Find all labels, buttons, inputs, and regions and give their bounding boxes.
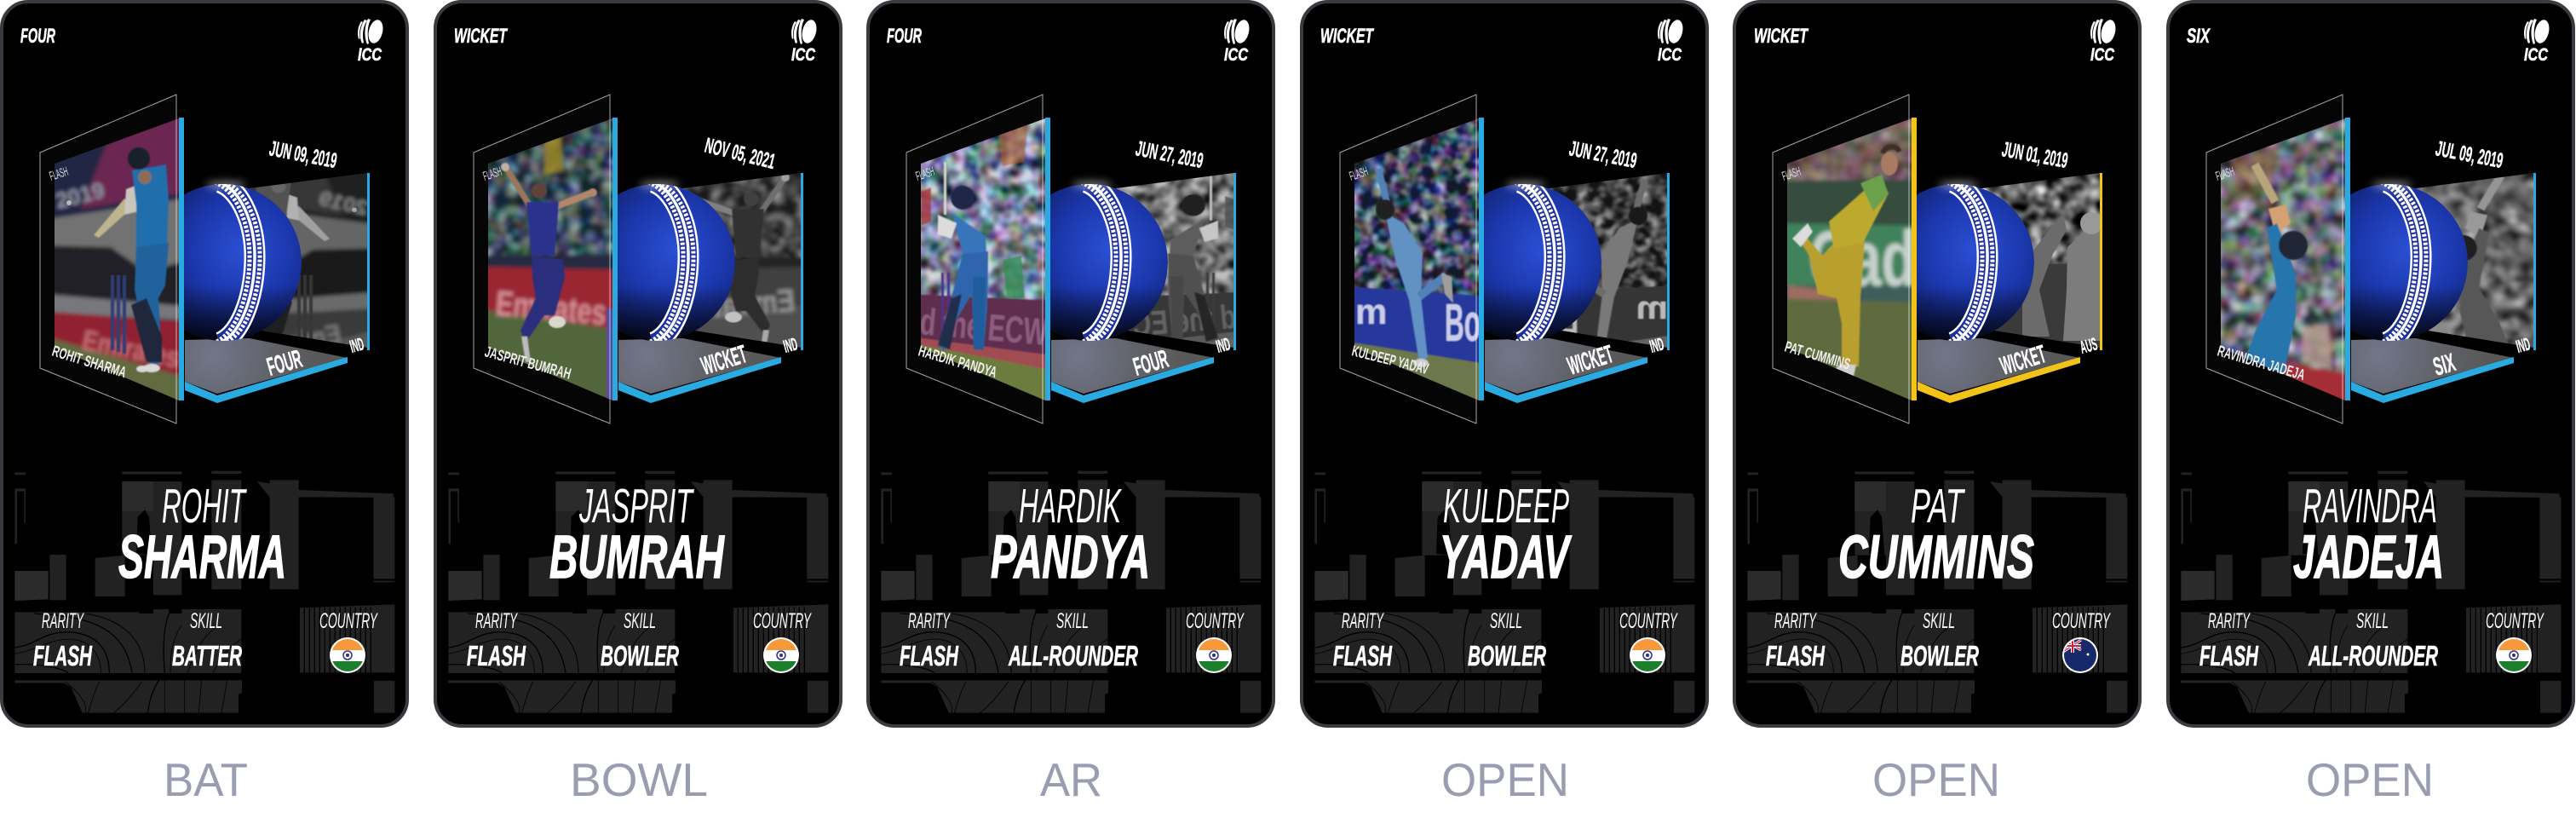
cricket ball	[145, 182, 302, 343]
floor event: SIX	[2430, 349, 2458, 382]
card frame	[2168, 2, 2573, 726]
skill label: SKILL	[1490, 609, 1522, 633]
floor	[1918, 338, 2080, 394]
team code: IND	[348, 334, 366, 357]
back edge bar	[801, 173, 803, 350]
event tag: FOUR	[887, 25, 922, 48]
floor	[185, 338, 348, 394]
icon: India flag	[1196, 637, 1232, 673]
role caption: OPEN	[1441, 753, 1569, 806]
back mirrored photo	[1115, 173, 1233, 348]
back edge bar	[1667, 173, 1670, 350]
background texture	[1747, 471, 2127, 713]
icon: ICC logo: ICC	[358, 45, 382, 65]
player on photo: ROHIT SHARMA	[50, 343, 129, 381]
icon: ICC logo	[791, 18, 819, 65]
icon: India flag	[330, 637, 365, 673]
floor edge	[1918, 357, 2080, 403]
skill value: ALL-ROUNDER	[2308, 640, 2438, 671]
date: JUN 01, 2019	[2000, 137, 2070, 173]
first name: PAT	[1911, 479, 1966, 533]
cricket ball	[2311, 182, 2468, 343]
rarity value: FLASH	[1333, 640, 1393, 671]
card 4: Kuldeep Yadav: WICKET	[1564, 340, 1617, 381]
team code: IND	[2514, 334, 2533, 357]
floor edge	[618, 357, 781, 403]
back edge bar	[367, 173, 370, 350]
front edge bar	[2345, 118, 2350, 400]
team code: IND	[1647, 334, 1666, 357]
background texture	[448, 471, 828, 713]
back mirrored photo	[249, 173, 367, 348]
card 4: Kuldeep Yadav	[1302, 2, 1707, 806]
rarity on photo: FLASH	[1780, 164, 1803, 184]
date: JUN 27, 2019	[1567, 136, 1639, 173]
rarity label: RARITY	[1774, 609, 1817, 633]
rarity label: RARITY	[1342, 609, 1384, 633]
skill value: ALL-ROUNDER	[1008, 640, 1138, 671]
country label: COUNTRY	[1186, 609, 1245, 633]
floor event: FOUR	[264, 345, 305, 382]
icon: ICC logo: ICC	[1658, 45, 1682, 65]
team code: AUS	[2078, 334, 2100, 358]
event tag: WICKET	[1754, 25, 1809, 48]
rarity value: FLASH	[2199, 640, 2259, 671]
event tag: WICKET	[454, 25, 509, 48]
back edge bar	[1233, 173, 1236, 350]
glass panel	[40, 95, 176, 423]
role caption: BAT	[164, 753, 248, 806]
card 1: Rohit Sharma	[2, 2, 407, 806]
cricket ball	[1011, 182, 1168, 343]
date: NOV 05, 2021	[703, 134, 778, 174]
icon: ICC logo	[358, 18, 385, 65]
last name: JADEJA	[2293, 524, 2444, 591]
last name: SHARMA	[118, 524, 286, 591]
country label: COUNTRY	[319, 609, 378, 633]
cricket ball	[578, 182, 735, 343]
rarity on photo: FLASH	[481, 164, 503, 184]
icon: ICC logo: ICC	[1224, 45, 1249, 65]
icon: India flag	[763, 637, 799, 673]
skill value: BATTER	[172, 640, 242, 671]
first name: JASPRIT	[578, 479, 694, 533]
icon: ICC logo	[2524, 18, 2551, 65]
front edge bar	[1912, 118, 1917, 400]
player on photo: JASPRIT BUMRAH	[483, 343, 573, 383]
glass panel	[906, 95, 1043, 423]
rarity label: RARITY	[2208, 609, 2251, 633]
cricket ball	[1445, 182, 1601, 343]
team code: IND	[1214, 334, 1233, 357]
role caption: OPEN	[2306, 753, 2434, 806]
rarity value: FLASH	[900, 640, 959, 671]
back mirrored photo	[1549, 173, 1667, 348]
front edge bar	[1479, 118, 1484, 400]
country label: COUNTRY	[753, 609, 812, 633]
first name: ROHIT	[162, 479, 247, 533]
front edge bar	[1045, 118, 1050, 400]
cricket ball	[1877, 182, 2034, 343]
front photo	[1354, 118, 1479, 400]
rarity label: RARITY	[42, 609, 84, 633]
skill label: SKILL	[624, 609, 656, 633]
player on photo: HARDIK PANDYA	[917, 343, 999, 381]
card 2: Jasprit Bumrah	[435, 2, 841, 806]
role caption: OPEN	[1872, 753, 2000, 806]
floor	[618, 338, 781, 394]
card 5: Pat Cummins: WICKET	[1997, 340, 2050, 381]
rarity value: FLASH	[1766, 640, 1826, 671]
skill value: BOWLER	[601, 640, 679, 671]
first name: KULDEEP	[1443, 479, 1569, 533]
glass panel	[1773, 95, 1909, 423]
front photo	[55, 118, 179, 400]
icon: Australia flag	[2062, 637, 2098, 673]
rarity value: FLASH	[33, 640, 93, 671]
icon: ICC logo	[2090, 18, 2118, 65]
role caption: AR	[1040, 753, 1102, 806]
team code: IND	[781, 334, 800, 357]
card frame	[1302, 2, 1707, 726]
glass panel	[2206, 95, 2343, 423]
front photo	[921, 118, 1045, 400]
front edge bar	[179, 118, 184, 400]
skill value: BOWLER	[1468, 640, 1546, 671]
background texture	[2181, 471, 2561, 713]
rarity on photo: FLASH	[1348, 164, 1370, 184]
rarity label: RARITY	[475, 609, 518, 633]
icon: ICC logo: ICC	[2090, 45, 2115, 65]
event tag: SIX	[2187, 25, 2211, 48]
last name: CUMMINS	[1838, 524, 2034, 591]
back photo	[1981, 173, 2100, 348]
back mirrored photo	[2415, 173, 2533, 348]
floor	[1485, 338, 1647, 394]
first name: RAVINDRA	[2303, 479, 2437, 533]
floor edge	[185, 357, 348, 403]
background texture	[881, 471, 1261, 713]
last name: YADAV	[1440, 524, 1573, 591]
icon: India flag	[2496, 637, 2532, 673]
rarity on photo: FLASH	[2214, 164, 2236, 184]
last name: PANDYA	[991, 524, 1150, 591]
skill label: SKILL	[190, 609, 222, 633]
front edge bar	[612, 118, 618, 400]
floor event: FOUR	[1130, 345, 1171, 382]
background texture	[1314, 471, 1694, 713]
card 3: Hardik Pandya	[868, 2, 1274, 806]
player on photo: PAT CUMMINS	[1783, 338, 1852, 373]
player on photo: KULDEEP YADAV	[1350, 342, 1430, 377]
icon: ICC logo: ICC	[2524, 45, 2549, 65]
event tag: WICKET	[1320, 25, 1375, 48]
card 5: Pat Cummins	[1734, 2, 2140, 806]
card 6: Ravindra Jadeja	[2168, 2, 2573, 806]
card frame	[868, 2, 1274, 726]
icon: India flag	[1630, 637, 1665, 673]
icon: ICC logo	[1658, 18, 1685, 65]
skill label: SKILL	[1923, 609, 1955, 633]
glass panel	[1340, 95, 1476, 423]
floor edge	[2351, 357, 2514, 403]
floor	[1051, 338, 1214, 394]
card frame	[2, 2, 407, 726]
skill value: BOWLER	[1900, 640, 1979, 671]
glass panel	[474, 95, 610, 423]
card frame	[1734, 2, 2140, 726]
player on photo: RAVINDRA JADEJA	[2216, 343, 2307, 383]
skill label: SKILL	[1056, 609, 1089, 633]
card frame	[435, 2, 841, 726]
rarity on photo: FLASH	[48, 164, 70, 184]
floor	[2351, 338, 2514, 394]
floor edge	[1051, 357, 1214, 403]
icon: ICC logo	[1224, 18, 1251, 65]
role caption: BOWL	[570, 753, 708, 806]
back edge bar	[2100, 173, 2102, 350]
country label: COUNTRY	[2052, 609, 2111, 633]
country label: COUNTRY	[1619, 609, 1678, 633]
first name: HARDIK	[1019, 479, 1123, 533]
last name: BUMRAH	[549, 524, 725, 591]
background texture	[14, 471, 394, 713]
back edge bar	[2533, 173, 2536, 350]
date: JUL 09, 2019	[2434, 136, 2505, 173]
date: JUN 09, 2019	[267, 136, 339, 173]
event tag: FOUR	[20, 25, 55, 48]
icon: ICC logo: ICC	[791, 45, 816, 65]
front photo	[2221, 118, 2345, 400]
floor edge	[1485, 357, 1647, 403]
skill label: SKILL	[2356, 609, 2389, 633]
rarity label: RARITY	[908, 609, 951, 633]
rarity on photo: FLASH	[914, 164, 936, 184]
front photo	[1787, 118, 1912, 400]
date: JUN 27, 2019	[1134, 136, 1205, 173]
front photo	[488, 118, 612, 400]
back mirrored photo	[682, 173, 801, 348]
card 2: Jasprit Bumrah: WICKET	[698, 340, 750, 381]
rarity value: FLASH	[467, 640, 526, 671]
